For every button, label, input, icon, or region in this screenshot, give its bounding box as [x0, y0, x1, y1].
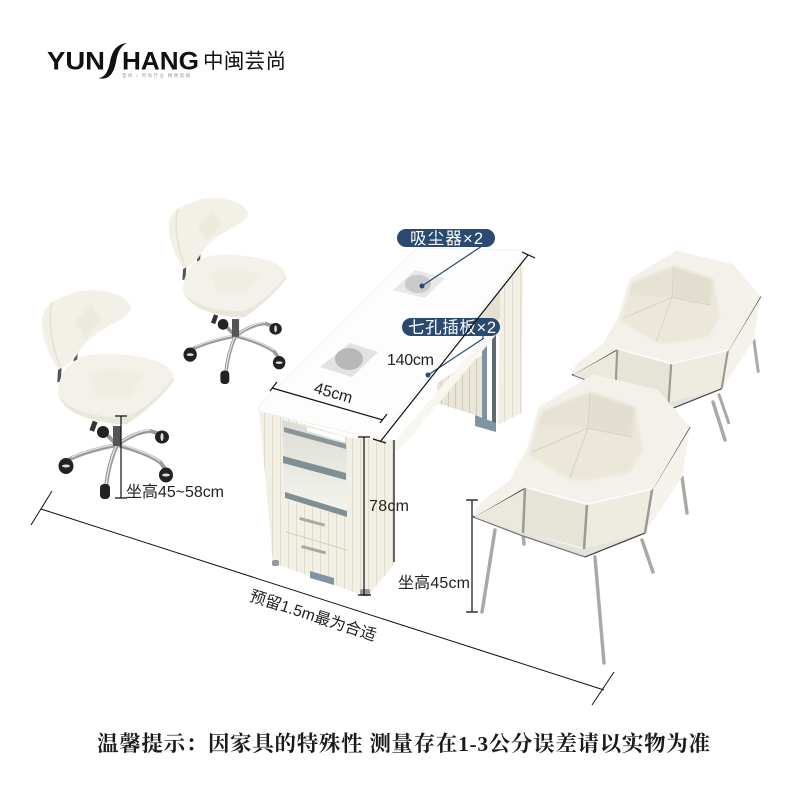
swivel stool rear [169, 198, 286, 384]
dimension 140cm: 140cm [387, 352, 434, 369]
swivel stool front [42, 290, 174, 499]
blue-grey metal legs [475, 335, 496, 432]
dimension armchair seat height: 坐高45cm [398, 574, 470, 592]
clearance dimension line: 预留1.5m最为合适 [247, 587, 379, 645]
nail desk [258, 248, 524, 597]
dimension 45cm: 45cm [312, 380, 354, 407]
bottom note: 温馨提示：因家具的特殊性 测量存在1-3公分误差请以实物为准 [97, 732, 710, 756]
callout vacuum x2: 吸尘器×2 [410, 229, 483, 248]
feet [272, 560, 370, 596]
logo Chinese name: 中闽芸尚 [203, 50, 286, 73]
side flap [394, 318, 500, 452]
dimension 78cm [358, 437, 409, 595]
dimension stool seat height: 坐高45~58cm [126, 483, 224, 501]
dimension 140cm [373, 252, 535, 443]
dimension armchair seat height [398, 500, 478, 612]
logo wordmark YUN: YUN [47, 48, 105, 76]
clearance dimension line [31, 491, 614, 705]
dimension 45cm [270, 380, 387, 423]
vacuum vent rear [393, 270, 445, 298]
vacuum vent front [320, 343, 378, 377]
open shelves [282, 420, 347, 517]
desk front cabinet [259, 410, 368, 597]
white table top [258, 248, 524, 439]
armchair front [473, 376, 690, 663]
logo tagline: 芸尚 / 时尚行业 精致高端 [122, 72, 190, 79]
leader line to vacuum [420, 246, 482, 288]
dimension stool seat height [115, 416, 224, 501]
armchair rear [572, 252, 761, 440]
logo wordmark HANG: HANG [122, 48, 199, 76]
dimension 78cm: 78cm [369, 498, 409, 515]
drawers [286, 517, 347, 554]
rear cabinet [437, 355, 482, 417]
leader line to socket [426, 338, 484, 378]
logo [47, 43, 286, 79]
logo swoosh S [98, 43, 127, 79]
callout socket x2: 七孔插板×2 [408, 318, 496, 337]
